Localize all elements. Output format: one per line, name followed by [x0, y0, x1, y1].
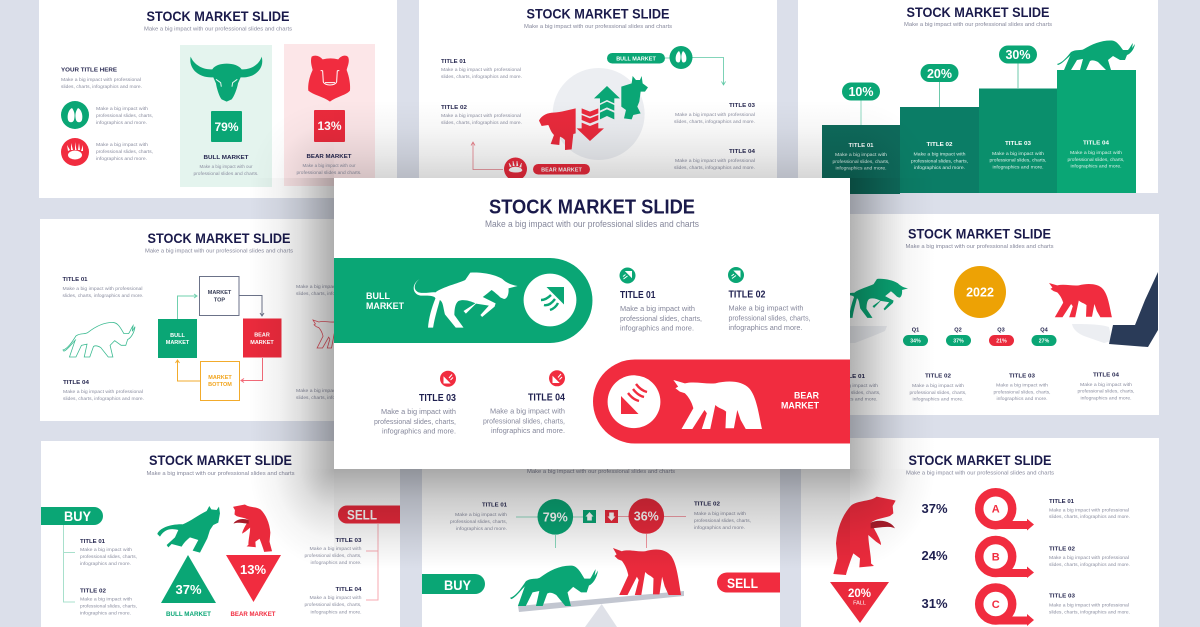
tag: buy: BUY [64, 509, 91, 524]
stat: 36 percent [628, 498, 664, 534]
icon: title 01 badge [620, 268, 636, 284]
panel: top right growth steps [798, 0, 1158, 194]
subtitle: bottom left: Make a big impact with our professional slides and charts [146, 471, 295, 477]
card: bear market [284, 44, 375, 186]
connectors: red stats [618, 516, 686, 548]
label: bear market: MARKET [781, 400, 819, 412]
text block: title 04 [483, 392, 565, 435]
illustration: outline bull [63, 323, 135, 357]
text block: title 01: slides, charts, infographics and more. [62, 293, 144, 298]
text block: title 02: TITLE 02 [80, 588, 106, 594]
stat: Q4: Q4 [1040, 328, 1049, 334]
stat: Q1: Q1 [912, 328, 919, 334]
text block: title 03: TITLE 03 [336, 538, 362, 544]
text block: title 01: professional slides, charts, [824, 390, 880, 395]
text block: title 01 [1049, 499, 1130, 519]
text block: title 03: TITLE 03 [729, 103, 755, 109]
icon: bull head [190, 57, 262, 102]
subtitle: bottom middle: Make a big impact with our professional slides and charts [527, 469, 675, 475]
text block: bull card: professional slides and charts. [194, 171, 258, 176]
text block: title 01: TITLE 01 [482, 502, 507, 508]
bar: step 1: TITLE 01 [848, 143, 874, 149]
heading: top middle: STOCK MARKET SLIDE [526, 6, 670, 22]
text block: title 03: Make a big impact with [381, 407, 456, 416]
text block: title 01 [620, 290, 702, 332]
text block: title 02: professional slides, charts, [694, 518, 751, 523]
text block: title 02: slides, charts, infographics and more. [441, 120, 522, 125]
bar: step 4: infographics and more. [1070, 164, 1122, 168]
subtitle: top left: Make a big impact with our professional slides and charts [144, 26, 292, 32]
text block: right column: slides, charts, infographics and more. [296, 395, 377, 400]
icon: loop arrow A: A [992, 504, 1000, 516]
text block: bear card: professional slides and charts. [296, 170, 362, 175]
illustration: outline bear [313, 320, 358, 348]
text block: title 02 [728, 290, 810, 332]
stat: 79 percent: 79% [214, 120, 239, 134]
panel: top left bull vs bear cards [39, 0, 397, 198]
callout: 10 percent [842, 82, 880, 125]
heading: bottom left: STOCK MARKET SLIDE [149, 452, 292, 468]
heading: middle left: STOCK MARKET SLIDE [148, 230, 290, 246]
text block: title 03: infographics and more. [382, 426, 456, 436]
box: bear market: MARKET [250, 340, 274, 346]
text block: title 04: TITLE 04 [729, 149, 756, 155]
icon: loop arrow A [979, 492, 1034, 530]
text block: title 01: Make a big impact with professional [1049, 508, 1129, 512]
box: bear market [243, 318, 282, 358]
text block: title 04: slides, charts, infographics and more. [674, 165, 755, 170]
tag: buy: BUY [444, 578, 471, 593]
text block: title 04: Make a big impact with [1080, 382, 1132, 387]
text block: your title here: slides, charts, infographics and more. [61, 84, 142, 89]
label: bear market: BEAR MARKET [230, 612, 276, 618]
text block: title 04: infographics and more. [491, 426, 565, 435]
chart: bear triangle 13 percent: 13% [240, 562, 266, 577]
illustration: seesaw plank [518, 591, 684, 612]
illustration: standing bear [833, 497, 896, 575]
text block: title 02 [1049, 546, 1130, 567]
box: bear market: BEAR [254, 332, 270, 338]
bar: step 3: infographics and more. [992, 164, 1044, 170]
text block: title 04 [674, 149, 756, 170]
icon: bear paw [61, 138, 89, 166]
tag: sell: SELL [727, 576, 758, 591]
text block: bull note [96, 106, 153, 125]
bar: step 4: Make a big impact with [1070, 150, 1122, 155]
subtitle: middle right: Make a big impact with our professional slides and charts [906, 244, 1054, 250]
tag: sell: SELL [347, 508, 377, 522]
text block: title 02: TITLE 02 [1049, 546, 1075, 552]
bar: step 3: TITLE 03 [1005, 141, 1031, 147]
label: bull market: BULL MARKET [166, 612, 211, 618]
icon: loop arrow B [979, 540, 1034, 578]
panel: bottom right bear fall [801, 438, 1159, 627]
text block: title 03: Make a big impact with professional [1049, 602, 1129, 608]
text block: title 03: Make a big impact with [310, 546, 362, 551]
icon: loop arrow C: C [992, 599, 1000, 611]
icon: loop arrow B: B [992, 552, 1000, 564]
box: bull market: BULL [170, 333, 185, 339]
bar: step 2: Make a big impact with [914, 152, 966, 156]
subtitle: top middle: Make a big impact with our professional slides and charts [524, 24, 672, 30]
box: market bottom [200, 362, 240, 400]
bar: step 1: Make a big impact with [835, 152, 887, 157]
stat: Q2: Q2 [954, 328, 962, 334]
bar: step 3 [979, 88, 1057, 193]
illustration: right hand and sleeve [1072, 272, 1158, 347]
tag: buy [422, 574, 485, 594]
text block: title 02 [694, 502, 751, 530]
subtitle: top right: Make a big impact with our professional slides and charts [904, 22, 1052, 28]
text block: title 03: infographics and more. [310, 560, 362, 565]
text block: title 04 [1078, 372, 1134, 400]
connectors: stats [516, 517, 583, 548]
text block: title 04: TITLE 04 [1093, 372, 1120, 378]
text block: title 04: professional slides, charts, [483, 416, 565, 426]
label: bear market: BEAR MARKET [306, 154, 352, 160]
text block: title 04: Make a big impact with professional [675, 158, 755, 163]
text block: title 02: TITLE 02 [728, 290, 766, 300]
bar: step 2: professional slides, charts, [911, 158, 968, 164]
bar: step 2 [900, 107, 979, 193]
text block: title 02: TITLE 02 [694, 502, 720, 508]
text block: right column: Make a big impact with professional [296, 284, 376, 289]
text block: title 04: TITLE 04 [528, 392, 565, 404]
text block: title 01: infographics and more. [456, 526, 507, 531]
text block: your title here [61, 68, 142, 89]
band: bear market [593, 360, 850, 444]
text block: title 02: infographics and more. [80, 610, 131, 616]
text block: title 03 [304, 538, 362, 565]
text block: title 03: slides, charts, infographics and more. [674, 119, 755, 124]
text block: your title here: YOUR TITLE HERE [61, 68, 117, 74]
heading: top right: STOCK MARKET SLIDE [906, 4, 1050, 20]
text block: bear note: Make a big impact with [96, 142, 148, 147]
text block: title 04 [63, 380, 144, 401]
text block: title 01: Make a big impact with [620, 304, 695, 313]
illustration: seesaw bear [613, 548, 681, 595]
tag: buy [41, 507, 103, 525]
text block: bull note: infographics and more. [96, 120, 147, 125]
illustration: red bear [1049, 283, 1112, 317]
stat: 36 percent: 36% [634, 510, 659, 524]
text block: title 04: professional slides, charts, [1078, 388, 1134, 394]
text block: title 01: Make a big impact with [455, 512, 507, 517]
text block: right column: slides, charts, infographics and more. [296, 291, 377, 296]
illustration: seesaw bull [510, 566, 598, 606]
text block: title 01 [62, 277, 144, 298]
stat: 31 percent: 31% [921, 596, 948, 611]
text block: title 02 [80, 588, 137, 616]
text block: title 01: TITLE 01 [620, 290, 656, 301]
text block: title 03: TITLE 03 [1009, 374, 1035, 380]
text block: title 03 [994, 374, 1050, 401]
box: market top: MARKET [208, 290, 232, 296]
illustration: standing bear [233, 504, 272, 552]
box: bull market [158, 319, 197, 358]
text block: title 04: infographics and more. [1080, 396, 1132, 400]
text block: title 02: Make a big impact with [694, 511, 746, 516]
badge: 2022 [954, 266, 1006, 318]
text block: title 03: professional slides, charts, [994, 390, 1050, 394]
text block: bear note: infographics and more. [96, 156, 147, 161]
badge: 2022: 2022 [966, 286, 994, 300]
bar: step 3: professional slides, charts, [990, 158, 1046, 162]
text block: title 02: Make a big impact with [728, 304, 804, 312]
bar: step 3: Make a big impact with [992, 151, 1044, 156]
text block: title 03 [1049, 594, 1130, 614]
text block: right column [296, 284, 377, 400]
heading: top left: STOCK MARKET SLIDE [146, 8, 290, 24]
callout: 20 percent [920, 64, 958, 107]
text block: bull card: Make a big impact with our [200, 164, 253, 169]
icon: down arrow [605, 510, 618, 523]
stat: 79 percent [211, 111, 242, 142]
text block: title 03: TITLE 03 [1049, 594, 1075, 600]
text block: title 02: Make a big impact with [912, 383, 964, 388]
text block: title 04: Make a big impact with professional [63, 389, 143, 394]
box: market top [200, 276, 239, 316]
callout: 10 percent: 10% [848, 85, 874, 99]
text block: title 01: TITLE 01 [839, 374, 865, 380]
stat: Q2: 37% [953, 338, 964, 344]
stat: 13 percent: 13% [317, 119, 342, 133]
chart: bull triangle 37 percent: 37% [175, 582, 202, 597]
stat: 79 percent [538, 499, 573, 535]
text block: bull card [194, 164, 258, 176]
stat: Q3: Q3 [997, 328, 1005, 334]
icon: falling arrow [608, 375, 660, 428]
text block: title 02: TITLE 02 [441, 105, 467, 111]
text block: title 01: Make a big impact with [80, 547, 132, 552]
text block: title 02: professional slides, charts, [728, 314, 810, 322]
stat: 37 percent: 37% [921, 501, 948, 516]
text block: title 02: professional slides, charts, [80, 604, 137, 608]
text block: title 04: slides, charts, infographics and more. [63, 396, 144, 401]
text block: title 03: infographics and more. [996, 396, 1048, 401]
icon: title 04 badge [549, 370, 565, 386]
text block: title 01: infographics and more. [826, 396, 878, 402]
icon: rising arrow [524, 274, 576, 326]
text block: title 03 [674, 103, 755, 124]
text block: title 01: Make a big impact with professional [441, 67, 521, 72]
text block: title 02: infographics and more. [728, 323, 802, 332]
stat: Q4 [1032, 328, 1056, 346]
text block: your title here: Make a big impact with professional [61, 77, 141, 82]
panel: middle right 2022 quarters [800, 214, 1159, 415]
chart: fall triangle [830, 582, 889, 623]
icon: up arrow [583, 510, 596, 523]
text block: title 01: TITLE 01 [441, 59, 466, 65]
bar: step 1: infographics and more. [836, 166, 886, 170]
stat: Q3: 21% [996, 338, 1007, 344]
heading: middle right: STOCK MARKET SLIDE [908, 226, 1051, 242]
text block: title 02: infographics and more. [694, 525, 745, 530]
subtitle: central: Make a big impact with our professional slides and charts [485, 219, 699, 229]
icon: title 03 badge [440, 371, 456, 387]
box: market bottom: MARKET [208, 375, 232, 381]
chart: bear triangle 13 percent [226, 555, 281, 602]
text block: title 01: Make a big impact with [826, 383, 878, 388]
illustration: seesaw base [585, 604, 617, 627]
panel: bottom middle seesaw [422, 445, 780, 627]
text block: title 01 [80, 539, 137, 566]
text block: title 01: TITLE 01 [1049, 499, 1074, 505]
bar: step 1: professional slides, charts, [832, 159, 890, 164]
text block: title 02: infographics and more. [912, 396, 964, 402]
chart: bull triangle 37 percent [161, 555, 216, 603]
bar: step 2: infographics and more. [914, 165, 965, 170]
text block: title 01: TITLE 01 [80, 539, 105, 545]
text block: title 04: TITLE 04 [336, 587, 362, 593]
card: bull market [180, 45, 272, 187]
text block: title 02 [441, 105, 522, 125]
text block: title 01: Make a big impact with professional [62, 286, 142, 291]
bar: step 4: professional slides, charts, [1068, 157, 1124, 162]
text block: title 02: slides, charts, infographics and more. [1049, 562, 1130, 567]
text block: title 03: Make a big impact with [996, 382, 1048, 388]
text block: bear note: professional slides, charts, [96, 149, 153, 154]
chart: fall triangle: 20% [848, 588, 871, 600]
text block: title 01: slides, charts, infographics and more. [441, 74, 522, 79]
stat: Q3 [989, 328, 1014, 346]
text block: title 01 [450, 502, 507, 531]
label: bull market: MARKET [366, 301, 404, 312]
label: bull market: BULL [366, 291, 390, 302]
illustration: left glove [845, 326, 887, 343]
text block: title 01: slides, charts, infographics and more. [1049, 514, 1130, 519]
label: bear market [781, 390, 819, 412]
stat: 13 percent [314, 110, 345, 142]
heading: central: STOCK MARKET SLIDE [489, 196, 695, 218]
text block: title 02: TITLE 02 [925, 374, 951, 380]
label: bull market [366, 291, 404, 312]
panel: top middle bear and bull arrows [419, 0, 777, 190]
illustration: bull on top step [1057, 40, 1135, 70]
stat: 79 percent: 79% [543, 510, 568, 524]
text block: title 03: TITLE 03 [419, 393, 456, 404]
text block: bear card [296, 163, 362, 175]
box: market top: TOP [214, 298, 225, 304]
text block: title 02: professional slides, charts, [910, 390, 966, 395]
label: bull market: BULL MARKET [204, 155, 249, 161]
stat: Q4: 27% [1039, 338, 1050, 344]
stat: Q2 [946, 328, 971, 346]
illustration: white bull [414, 272, 518, 328]
label: bear market: BEAR [794, 390, 819, 402]
panel: central main slide [334, 178, 850, 469]
subtitle: bottom right: Make a big impact with our professional slides and charts [906, 470, 1054, 476]
box: market bottom: BOTTOM [208, 382, 232, 388]
bar: step 4: TITLE 04 [1083, 140, 1110, 146]
illustration: bear and bull with arrows [539, 68, 648, 160]
icon: title 02 badge [728, 267, 744, 283]
text block: title 04: infographics and more. [310, 610, 362, 614]
subtitle: middle left: Make a big impact with our professional slides and charts [145, 248, 293, 254]
text block: title 03 [374, 393, 456, 436]
illustration: rearing bull [157, 506, 220, 553]
text block: title 04: TITLE 04 [63, 380, 90, 386]
tag: bull market: BULL MARKET [616, 56, 656, 62]
tag: bear market [471, 142, 590, 180]
box: bull market: MARKET [166, 340, 190, 346]
text block: title 02: Make a big impact with professional [441, 113, 521, 118]
text block: bear note [96, 142, 153, 161]
illustration: white bear [673, 380, 762, 429]
tag: bear market: BEAR MARKET [541, 167, 582, 173]
bar: step 1 [822, 125, 900, 194]
text block: title 02: Make a big impact with [80, 596, 132, 602]
text block: title 01: infographics and more. [620, 324, 694, 332]
text block: title 02 [910, 374, 966, 402]
icon: bear head [308, 56, 350, 102]
tag: sell [338, 506, 400, 524]
text block: title 02: Make a big impact with professional [1049, 555, 1129, 560]
connector: buy list [64, 525, 75, 602]
icon: bull hoof [61, 101, 89, 129]
text block: title 03: slides, charts, infographics and more. [1049, 610, 1130, 614]
bar: step 4 [1057, 70, 1136, 193]
illustration: green bull [840, 279, 908, 318]
connector: sell list [366, 524, 378, 600]
band: bull market [334, 258, 592, 343]
text block: bull note: professional slides, charts, [96, 113, 153, 118]
tag: sell [717, 572, 780, 592]
text block: title 01 [824, 374, 880, 402]
text block: title 01 [441, 59, 522, 79]
text block: title 04: Make a big impact with [490, 406, 565, 416]
panel: bottom left buy and sell [41, 441, 400, 627]
text block: title 04 [304, 587, 362, 614]
text block: title 01: professional slides, charts, [450, 519, 507, 524]
text block: bull note: Make a big impact with [96, 106, 148, 111]
arrows: cycle connectors [176, 294, 264, 382]
heading: bottom right: STOCK MARKET SLIDE [908, 452, 1052, 468]
callout: 30 percent: 30% [1005, 48, 1031, 62]
text block: title 01: professional slides, charts, [80, 554, 137, 559]
text block: title 03: professional slides, charts, [374, 417, 456, 426]
text block: title 01: TITLE 01 [62, 277, 88, 283]
text block: title 01: infographics and more. [80, 561, 131, 566]
text block: title 04: Make a big impact with [310, 595, 362, 600]
callout: 30 percent [999, 46, 1037, 89]
panel: middle left market cycle [40, 219, 377, 421]
bar: step 2: TITLE 02 [926, 142, 952, 148]
text block: title 03: professional slides, charts, [304, 553, 362, 558]
icon: loop arrow C [979, 588, 1034, 626]
callout: 20 percent: 20% [927, 67, 952, 81]
text block: title 04: professional slides, charts, [304, 602, 362, 607]
stat: 24 percent: 24% [921, 548, 948, 563]
stat: Q1: 34% [910, 338, 921, 344]
tag: bull market [607, 46, 726, 85]
text block: title 01: professional slides, charts, [620, 314, 702, 323]
text block: bear card: Make a big impact with our [302, 163, 356, 168]
chart: fall triangle: FALL [853, 600, 866, 606]
text block: right column: Make a big impact with professional [296, 388, 376, 393]
stat: Q1 [903, 328, 928, 346]
text block: title 03: Make a big impact with professional [675, 112, 755, 117]
